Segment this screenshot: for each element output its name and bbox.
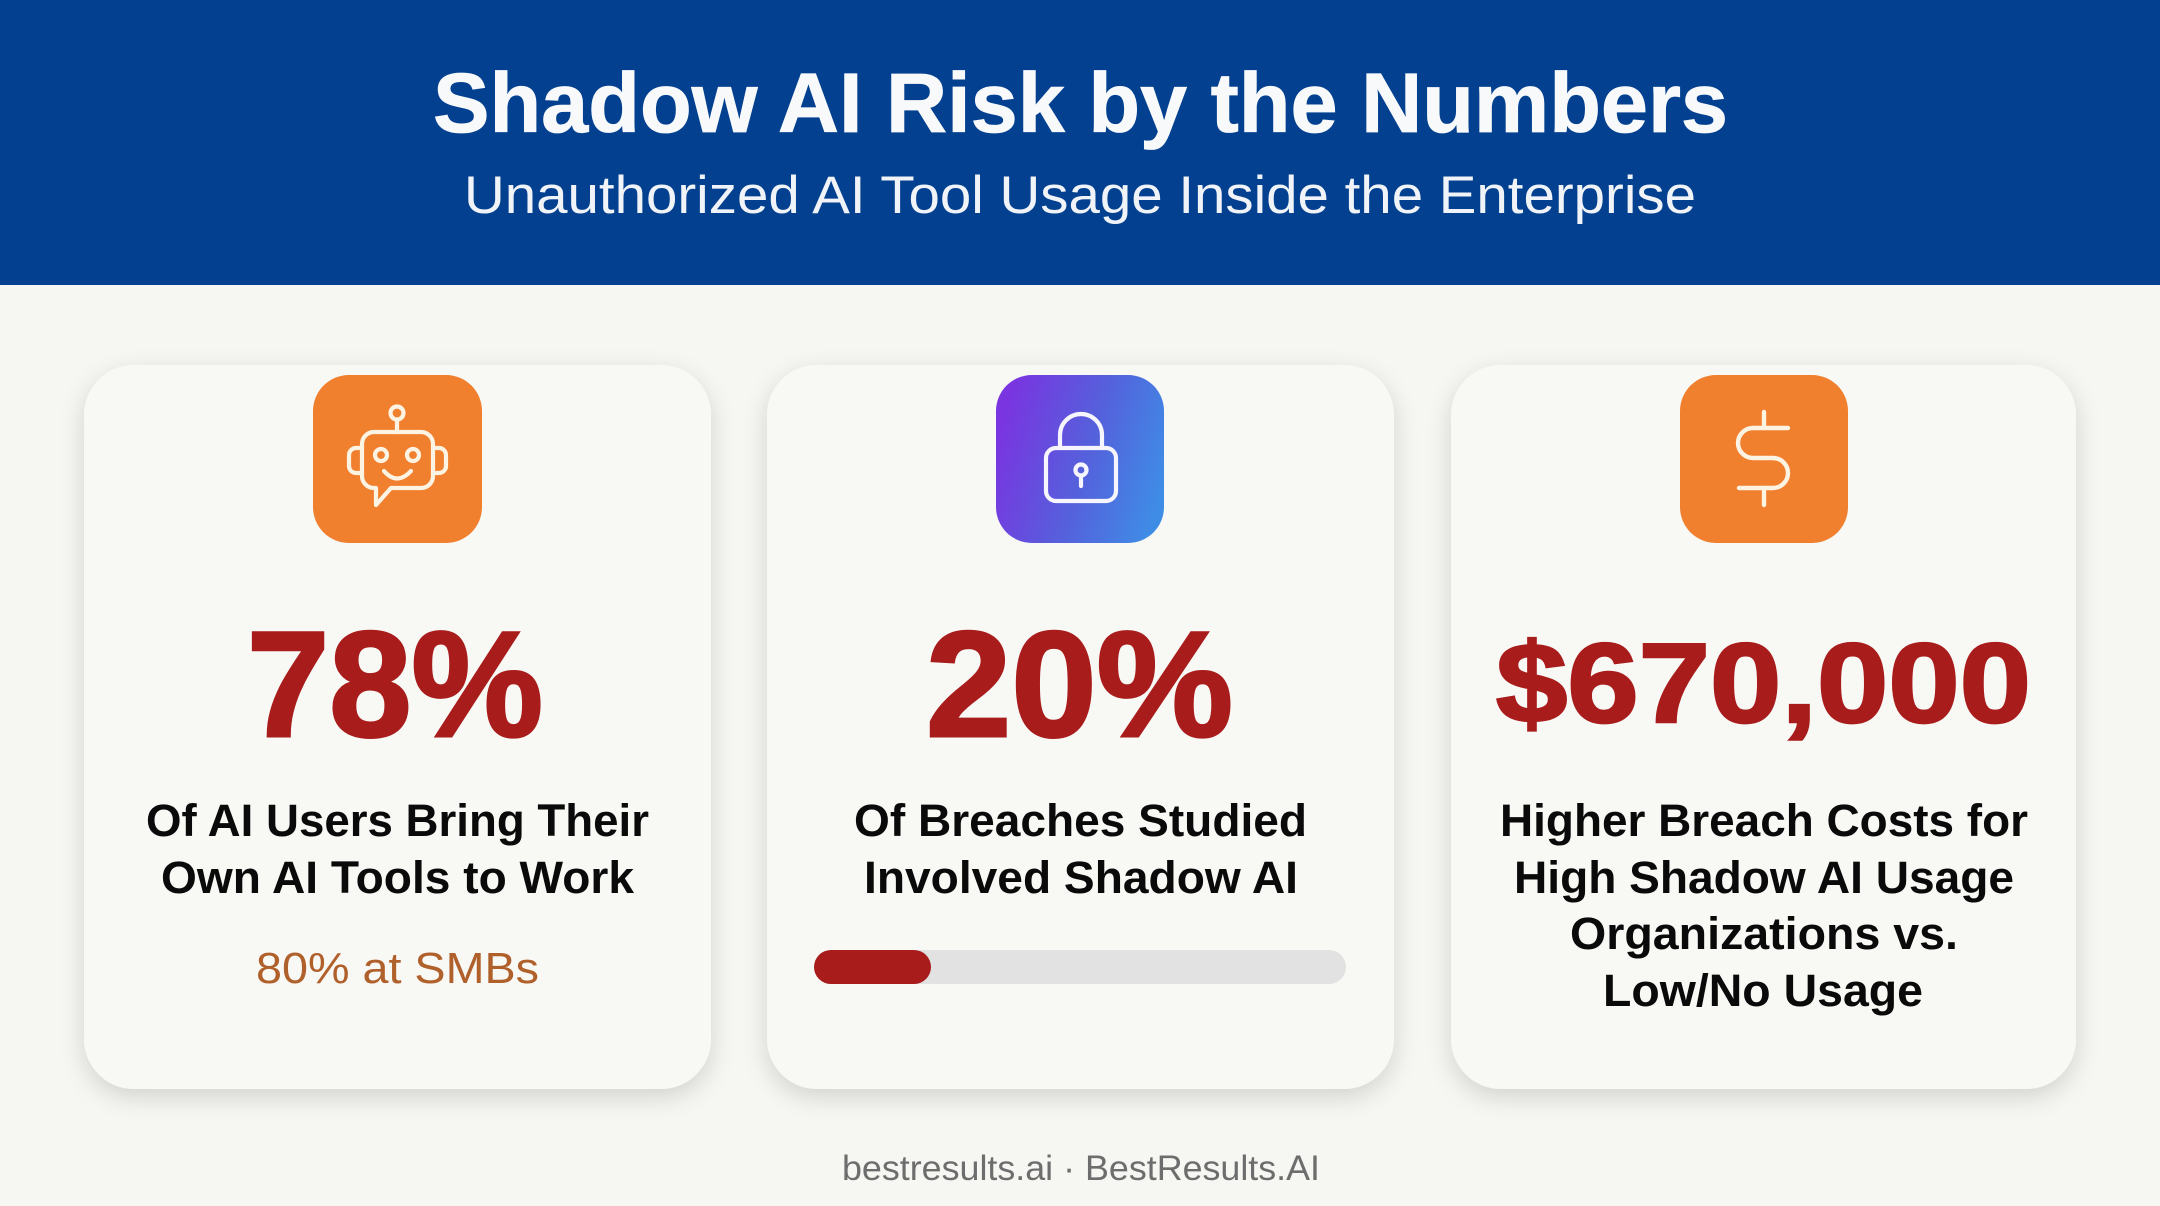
- subtitle: Unauthorized AI Tool Usage Inside the Enterprise: [464, 166, 1696, 225]
- panel: breaches card: [767, 365, 1394, 1089]
- description: breach costs: Low/No Usage: [1603, 965, 1923, 1016]
- statistic: 20%: 20%: [926, 600, 1233, 768]
- description: breach costs: Higher Breach Costs for: [1500, 795, 2028, 846]
- panel: breach costs card: [1451, 365, 2076, 1089]
- icon: robot chat: [313, 375, 482, 543]
- description: AI users: Own AI Tools to Work: [161, 852, 635, 903]
- icon: padlock: [996, 375, 1164, 543]
- progress bar: 20 percent: [814, 950, 1346, 984]
- description: breach costs: High Shadow AI Usage: [1514, 852, 2014, 903]
- description: breaches: Involved Shadow AI: [864, 852, 1298, 903]
- description: breaches: Of Breaches Studied: [854, 795, 1307, 846]
- icon: dollar sign: [1680, 375, 1848, 543]
- description: breach costs: [1500, 795, 2028, 1016]
- statistic: $670,000: $670,000: [1496, 620, 2031, 746]
- description: AI users: [146, 795, 649, 903]
- panel: AI users card: [84, 365, 711, 1089]
- title: Shadow AI Risk by the Numbers: [433, 56, 1728, 150]
- statistic: 78%: 78%: [247, 600, 543, 768]
- header banner: [0, 0, 2160, 285]
- footer credit: bestresults.ai · BestResults.AI: [842, 1149, 1320, 1188]
- description: breach costs: Organizations vs.: [1570, 908, 1958, 959]
- description: AI users: Of AI Users Bring Their: [146, 795, 649, 846]
- description: breaches: [854, 795, 1307, 903]
- note: 80% at SMBs: 80% at SMBs: [256, 944, 539, 993]
